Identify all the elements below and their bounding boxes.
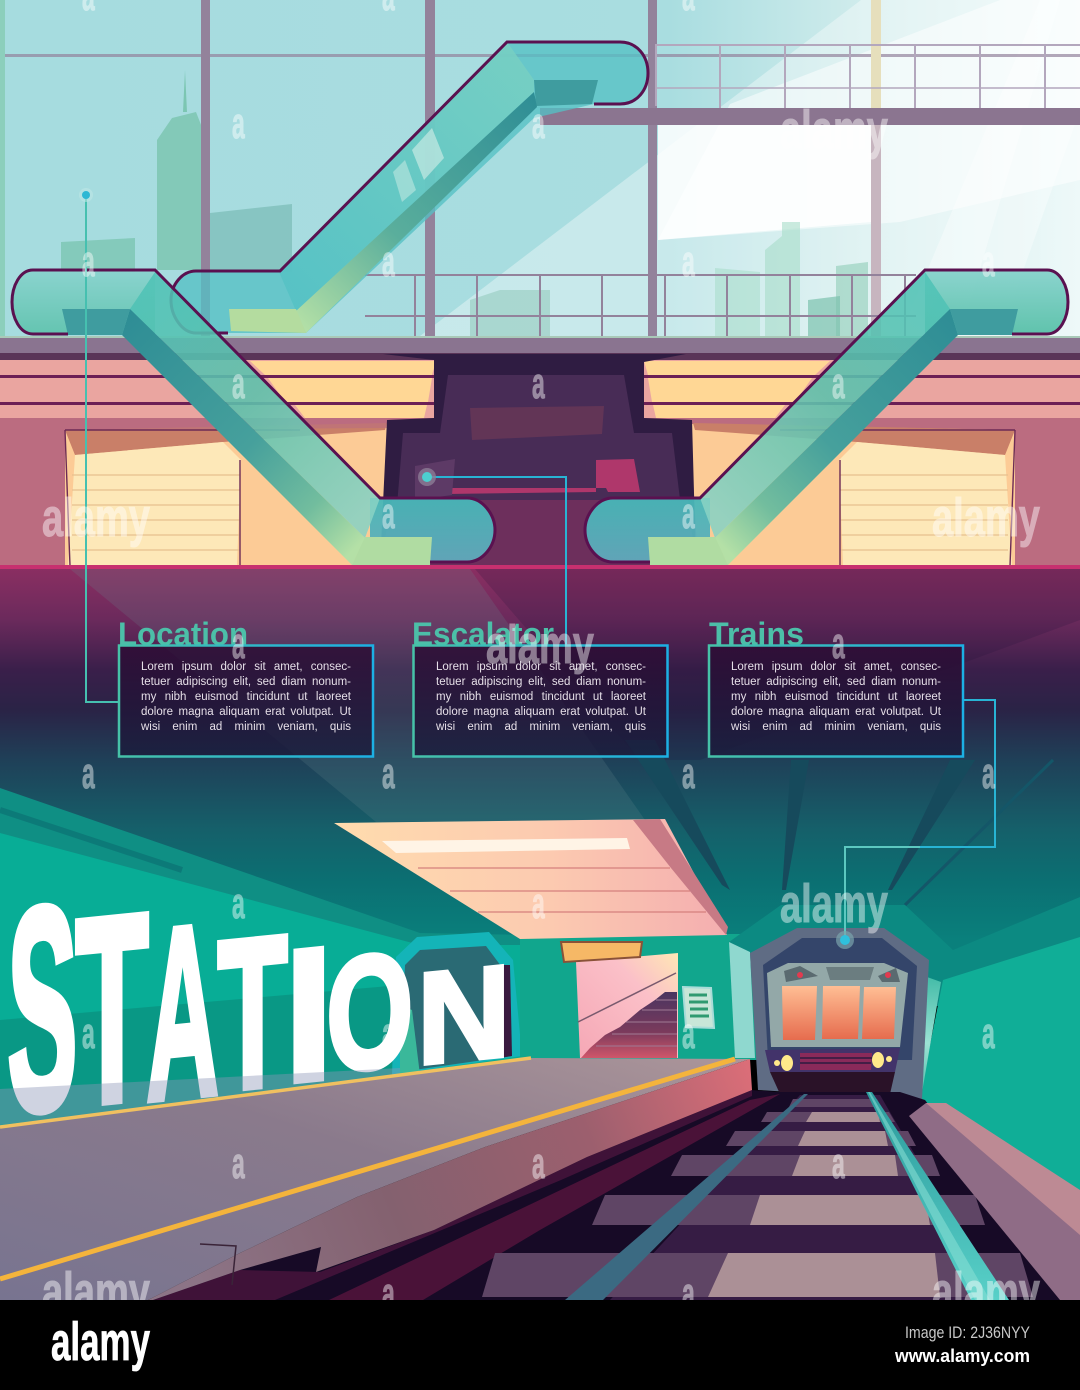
watermarks: a: [232, 1139, 245, 1188]
arch passage: [392, 932, 522, 1075]
text block: escalator copy: [436, 661, 646, 733]
notice board: [683, 987, 714, 1028]
panel: left platform wall: [0, 788, 530, 1130]
watermarks: alamy: [42, 1262, 150, 1322]
ceiling ribs: [625, 740, 975, 890]
right doorway: [690, 423, 1015, 566]
footer url: www.alamy.com: [894, 1346, 1030, 1366]
watermarks: a: [982, 749, 995, 798]
watermarks: a: [532, 359, 545, 408]
title: STATION: O: [326, 917, 413, 1108]
watermarks: alamy: [780, 874, 888, 934]
title: STATION: I: [284, 906, 333, 1123]
watermarks: a: [532, 99, 545, 148]
text block: escalator copy: Lorem ipsum dolor sit amet, consec-: [436, 661, 646, 673]
watermarks: a: [682, 749, 695, 798]
text block: trains copy: wisi enim ad minim veniam, quis: [731, 721, 941, 733]
upper walkway beam: [540, 108, 1080, 125]
connector: location: [79, 188, 119, 702]
escalator: lower left flight: [12, 270, 495, 565]
letter base shadow: [0, 1068, 400, 1125]
text block: escalator copy: dolore magna aliquam erat volutpat. Ut: [436, 706, 646, 718]
watermarks: a: [82, 237, 95, 286]
title: STATION: [7, 844, 511, 1173]
text block: trains copy: Lorem ipsum dolor sit amet, consec-: [731, 661, 941, 673]
panel: track bed: [148, 1090, 1080, 1300]
panel: escalator box: [414, 646, 668, 756]
watermarks: a: [532, 1139, 545, 1188]
watermarks: a: [232, 619, 245, 668]
panel: mezzanine wall: [0, 336, 1080, 568]
right rail: [866, 1092, 1009, 1300]
watermarks: a: [832, 1139, 845, 1188]
title: STATION: N: [417, 937, 511, 1093]
watermarks: a: [232, 879, 245, 928]
panel: ceiling light canopy: [334, 819, 728, 939]
watermarks: a: [682, 489, 695, 538]
title: STATION: A: [146, 872, 219, 1152]
text block: location copy: my nibh euismod tincidunt ut laoreet: [141, 691, 351, 703]
text block: location copy: wisi enim ad minim veniam, quis: [141, 721, 351, 733]
skyline buildings: [61, 70, 868, 336]
left rail: [565, 1094, 808, 1300]
watermarks: a: [832, 619, 845, 668]
watermarks: a: [382, 1009, 395, 1058]
text block: escalator copy: my nibh euismod tincidunt ut laoreet: [436, 691, 646, 703]
panel: platform: [0, 1058, 752, 1300]
watermarks: a: [82, 1009, 95, 1058]
title: STATION: T: [218, 891, 288, 1137]
hanging sign: [561, 942, 642, 962]
panel: rear wall with stair doorway: [520, 934, 760, 1060]
doorway: [576, 953, 678, 1058]
footer logo: alamy: [51, 1312, 150, 1372]
heading: Trains: Trains: [709, 616, 804, 652]
watermarks: a: [982, 1009, 995, 1058]
watermarks: a: [682, 237, 695, 286]
watermarks: alamy: [42, 488, 150, 548]
watermarks: a: [382, 489, 395, 538]
text block: location copy: [141, 661, 351, 733]
text block: location copy: Lorem ipsum dolor sit amet, consec-: [141, 661, 351, 673]
left doorway: [0, 418, 430, 566]
yellow edge lines: [0, 1058, 531, 1127]
watermarks: a: [382, 237, 395, 286]
light beams: [420, 0, 1080, 336]
connector: trains: [836, 700, 995, 949]
watermarks: a: [982, 237, 995, 286]
text block: trains copy: tetuer adipiscing elit, sed diam nonum-: [731, 676, 941, 688]
icon: train front: [765, 963, 908, 1094]
watermarks: a: [682, 1009, 695, 1058]
upper railing: [656, 45, 1080, 108]
title: STATION: S: [7, 844, 77, 1173]
watermarks: a: [82, 749, 95, 798]
escalator: upper flight: [171, 42, 648, 333]
watermarks: a: [532, 879, 545, 928]
text block: location copy: dolore magna aliquam erat volutpat. Ut: [141, 706, 351, 718]
skylight stripes: [250, 361, 830, 418]
stairs: [578, 973, 677, 1058]
text block: trains copy: my nibh euismod tincidunt ut laoreet: [731, 691, 941, 703]
central dark stairwell: [380, 354, 696, 566]
heading: Escalator: Escalator: [412, 616, 554, 652]
watermarks: a: [682, 1269, 695, 1318]
panel: underground gradient band: [0, 565, 1080, 1006]
panel: tunnel surround and right wall: [729, 897, 1080, 1300]
text block: escalator copy: tetuer adipiscing elit, sed diam nonum-: [436, 676, 646, 688]
watermarks: a: [382, 1269, 395, 1318]
heading: Location: Location: [118, 616, 248, 652]
footer bar: [0, 1300, 1080, 1390]
panel: location box: [119, 646, 373, 756]
watermarks: a: [232, 359, 245, 408]
text block: trains copy: dolore magna aliquam erat volutpat. Ut: [731, 706, 941, 718]
text block: escalator copy: wisi enim ad minim veniam, quis: [436, 721, 646, 733]
watermarks: a: [232, 99, 245, 148]
watermarks: a: [382, 749, 395, 798]
right ledge: [909, 1103, 1080, 1300]
lower railing: [365, 275, 916, 336]
watermarks: a: [832, 359, 845, 408]
footer image id: Image ID: 2J36NYY: [905, 1323, 1030, 1342]
watermarks: alamy: [780, 100, 888, 160]
title: STATION: T: [75, 858, 149, 1161]
panel: trains box: [709, 646, 963, 756]
connector: escalator: [418, 468, 566, 646]
text block: location copy: tetuer adipiscing elit, sed diam nonum-: [141, 676, 351, 688]
sleepers: [482, 1099, 1033, 1297]
panel: station window with skyline: [0, 0, 1080, 340]
window frame: [0, 0, 1080, 336]
tunnel mouth: [750, 928, 929, 1100]
text block: trains copy: [731, 661, 941, 733]
watermarks: alamy: [486, 615, 594, 675]
escalator: lower right flight: [585, 270, 1068, 565]
